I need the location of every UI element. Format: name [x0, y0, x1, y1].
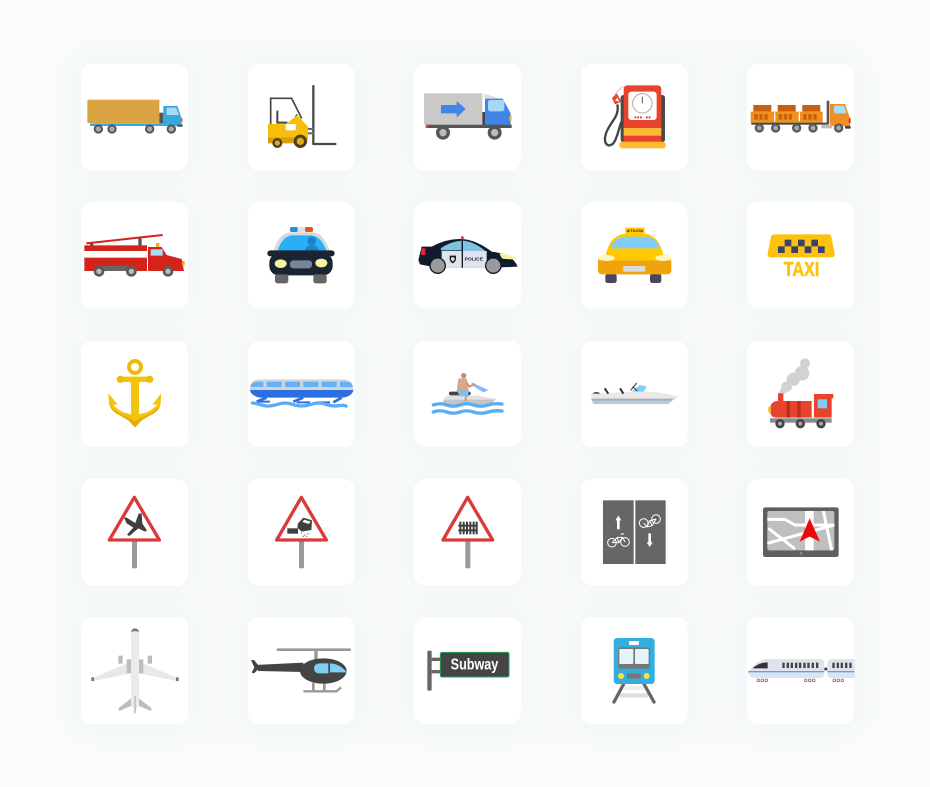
panel: front-view train: [581, 617, 688, 724]
panel: fire truck: [81, 202, 188, 308]
icon: slippery road warning sign: [277, 497, 326, 568]
panel: low aircraft sign: [81, 479, 188, 586]
panel: jet ski: [414, 341, 521, 447]
panel: railway crossing sign: [414, 479, 521, 586]
icon: subway street sign: Subway: [451, 656, 498, 673]
panel: bicycle lanes sign: [581, 479, 688, 586]
panel: GPS navigator: [747, 479, 854, 586]
panel: flatbed truck: [747, 64, 854, 170]
icon: railway crossing warning sign: [443, 497, 493, 568]
panel: speedboat: [581, 341, 688, 447]
panel: helicopter: [248, 617, 354, 724]
icon: police car side: POLICE: [465, 257, 484, 263]
icon: airplane top view: [91, 628, 179, 713]
icon: steam locomotive: [768, 358, 833, 428]
icon: fire truck: [84, 234, 185, 277]
icon: hydrofoil boat: [250, 379, 353, 406]
panel: taxi car: [581, 202, 688, 308]
panel: subway sign: [414, 617, 521, 724]
icon: cargo truck: [87, 100, 183, 134]
panel: hydrofoil boat: [248, 341, 354, 447]
icon: taxi car front: ※TAXI※: [626, 228, 645, 233]
icon: fuel pump: [605, 85, 666, 148]
icon: forklift: [268, 86, 335, 148]
panel: fuel pump: [581, 64, 688, 170]
panel: police car front: [248, 202, 354, 308]
icon: GPS tablet map: [763, 507, 839, 557]
icon: bullet train: [748, 659, 857, 682]
icon: jet ski rider: [433, 373, 502, 413]
icon: flatbed truck with crates: [751, 101, 851, 133]
panel: steam train: [747, 341, 854, 447]
icon: speedboat: [591, 383, 678, 404]
icon: delivery truck: [424, 93, 512, 140]
icon: police car front: [267, 227, 335, 283]
icon: bicycle lanes: [603, 500, 666, 564]
icon: helicopter: [251, 648, 351, 691]
panel: delivery truck: [414, 64, 521, 170]
icon: commuter train on tracks: [614, 638, 655, 702]
icon: taxi roof sign: TAXI: [784, 259, 819, 281]
panel: bullet train: [747, 617, 857, 724]
panel: anchor: [81, 341, 188, 447]
icon: anchor: [108, 361, 161, 427]
panel: police car side: [414, 202, 521, 308]
panel: airplane: [81, 617, 188, 724]
panel: slippery road sign: [248, 479, 354, 586]
panel: forklift: [248, 64, 354, 170]
icon: low flying aircraft warning sign: [109, 497, 159, 568]
panel: cargo truck: [81, 64, 188, 170]
panel: taxi sign: [747, 202, 854, 308]
